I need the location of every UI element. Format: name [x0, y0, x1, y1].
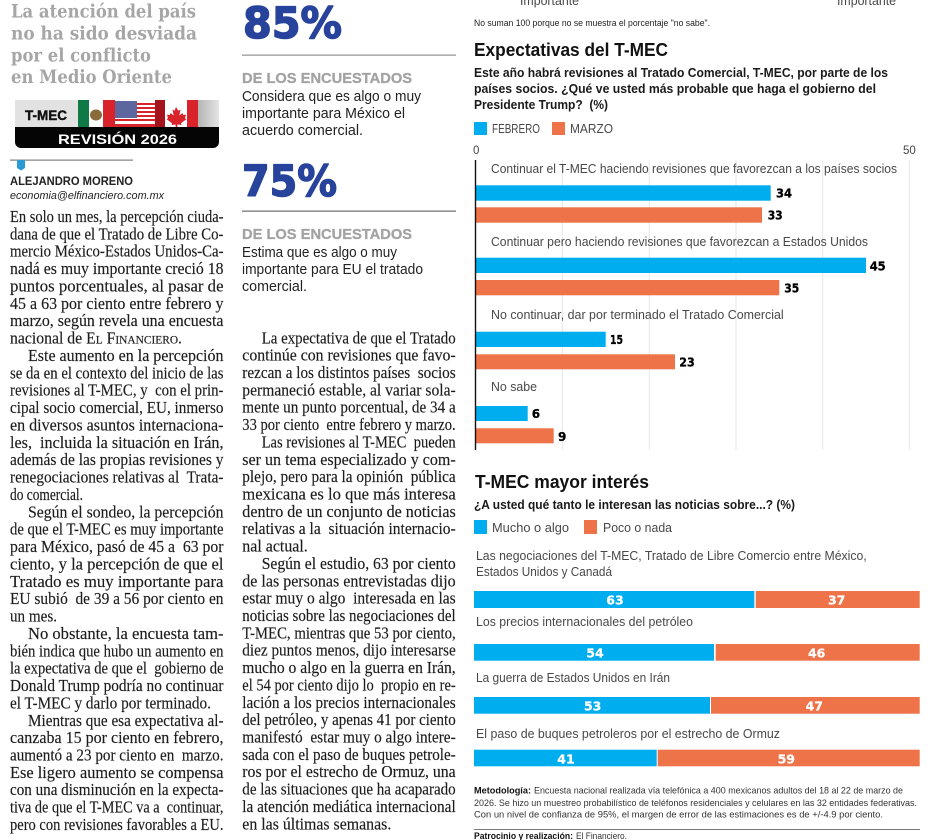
- article text column 2: mucho o algo en la guerra en Irán,: [242, 658, 456, 677]
- article text column 2: 33 por ciento entre febrero y marzo.: [242, 415, 456, 434]
- article text column 1: el T-MEC y darlo por terminado.: [10, 693, 211, 712]
- article text column 2: La expectativa de que el Tratado: [262, 328, 456, 347]
- article text column 1: [10, 207, 224, 834]
- stacked bar chart: interés: 63: [606, 592, 624, 607]
- headline: [11, 2, 197, 88]
- heading: T-MEC mayor interés: [475, 471, 649, 492]
- cropped chart labels at top: [520, 0, 896, 8]
- article text column 1: aumentó a 23 por ciento en marzo.: [10, 746, 224, 764]
- stat callout: 85%: DE LOS ENCUESTADOS: [242, 70, 412, 87]
- headline: por el conflicto: [11, 46, 151, 66]
- badge: T-MEC Revisión 2026: [15, 100, 219, 148]
- stat callout: 75%: importante para EU el tratado: [242, 262, 423, 278]
- article text column 1: de que el T-MEC es muy importante: [10, 520, 224, 539]
- article text column 1: Donald Trump podría no continuar: [10, 676, 224, 695]
- article text column 2: ros por el estrecho de Ormuz, una: [242, 762, 456, 781]
- article text column 2: de las personas entrevistadas dijo: [242, 571, 456, 590]
- article text column 1: 45 a 63 por ciento entre febrero y: [10, 294, 224, 313]
- icon: US flag: [115, 100, 155, 128]
- methodology note: Con un nivel de confianza de 95%, el margen de error de las estimaciones es de +/-4.9 por ciento.: [474, 810, 883, 821]
- question: ¿A usted qué tanto le interesan las noticias sobre...? (%): [474, 498, 795, 512]
- stacked bar chart: interés: Estados Unidos y Canadá: [476, 564, 613, 579]
- article text column 1: en diversos asuntos internaciona-: [10, 416, 224, 434]
- article text column 1: les, incluida la situación en Irán,: [10, 433, 224, 452]
- article text column 2: continúe con revisiones que favo-: [242, 346, 456, 365]
- legend: FEBRERO: [492, 121, 540, 136]
- methodology note: 2026. Se hizo un muestreo probabilístico de teléfonos residenciales y celulares en las 32 entidades federativas.: [474, 798, 917, 809]
- article text column 2: noticias sobre las negociaciones del: [242, 606, 456, 625]
- article text column 1: dana de que el Tratado de Libre Co-: [10, 224, 224, 243]
- bar chart: expectativas: 0: [473, 145, 479, 157]
- article text column 1: Mientras que esa expectativa al-: [28, 711, 224, 730]
- article text column 1: pero con revisiones favorables a EU.: [10, 815, 224, 834]
- bar chart: expectativas: 15: [610, 333, 623, 347]
- stacked bar chart: interés: Las negociaciones del T-MEC, Tratado de Libre Comercio entre México,: [476, 548, 867, 563]
- legend: Mucho o algo: [492, 520, 569, 535]
- article text column 2: relativas a la situación internacio-: [242, 519, 456, 538]
- article text column 1: mercio México-Estados Unidos-Ca-: [10, 242, 224, 261]
- article text column 2: nal actual.: [242, 537, 308, 556]
- article text column 1: con una disminución en la expecta-: [10, 780, 224, 799]
- heading: Expectativas del T-MEC: [474, 39, 668, 60]
- article text column 2: manifestó estar muy o algo intere-: [242, 728, 456, 746]
- article text column 1: No obstante, la encuesta tam-: [28, 624, 224, 643]
- article text column 2: [242, 328, 456, 833]
- article text column 1: ciento, y la percepción de que el: [10, 554, 224, 573]
- stacked bar chart: interés: Los precios internacionales del petróleo: [476, 614, 693, 629]
- headline: en Medio Oriente: [11, 67, 172, 88]
- author byline: ALEJANDRO MORENO: [10, 174, 133, 188]
- question: países socios. ¿Qué ve usted más probable que haga el gobierno del: [474, 82, 876, 96]
- legend: [474, 121, 613, 136]
- stat callout: 85%: [242, 0, 456, 139]
- article text column 1: nadá es muy importante creció 18: [10, 259, 224, 278]
- stacked bar chart: interés: 53: [584, 698, 601, 713]
- bar chart: expectativas: [473, 145, 916, 450]
- methodology note: [474, 785, 917, 821]
- panel: T-MEC mayor interés: [474, 471, 920, 766]
- article text column 1: para México, pasó de 45 a 63 por: [10, 537, 224, 556]
- badge: T-MEC Revisión 2026: T-MEC: [25, 108, 67, 123]
- stat callout: 85%: Considera que es algo o muy: [242, 89, 422, 105]
- stat callout: 75%: Estima que es algo o muy: [242, 245, 398, 261]
- question: [474, 66, 888, 112]
- credits: [474, 829, 920, 840]
- stacked bar chart: interés: 54: [586, 645, 604, 660]
- article text column 2: mente un punto porcentual, de 34 a: [242, 398, 456, 417]
- methodology note: Metodología:: [474, 785, 531, 796]
- article text column 1: tiva de que el T-MEC va a continuar,: [10, 798, 224, 817]
- stacked bar chart: interés: La guerra de Estados Unidos en Irán: [476, 670, 670, 685]
- article text column 2: ser un tema especializado y com-: [242, 450, 456, 469]
- article text column 1: Tratado es muy importante para: [10, 572, 224, 591]
- icon: Mexican flag: [78, 100, 115, 128]
- stacked bar chart: interés: [474, 548, 920, 766]
- article text column 1: Ese ligero aumento se compensa: [10, 763, 224, 782]
- question: Presidente Trump? (%): [474, 98, 608, 112]
- panel: Expectativas del T-MEC: [473, 39, 916, 450]
- article text column 1: cipal socio comercial, EU, inmerso: [10, 398, 224, 417]
- article text column 1: Según el sondeo, la percepción: [28, 502, 224, 521]
- stat callout: 75%: DE LOS ENCUESTADOS: [242, 226, 412, 243]
- stat callout: 75%: comercial.: [242, 279, 307, 295]
- bar chart: expectativas: No continuar, dar por terminado el Tratado Comercial: [491, 307, 784, 322]
- stacked bar chart: interés: 37: [828, 592, 845, 607]
- article text column 2: permaneció estable, al variar sola-: [242, 380, 456, 399]
- article text column 1: se da en el contexto del inicio de las: [10, 363, 224, 382]
- stacked bar chart: interés: 59: [778, 751, 795, 766]
- bar chart: expectativas: Continuar el T-MEC haciendo revisiones que favorezcan a los países socios: [491, 161, 897, 176]
- stacked bar chart: interés: 41: [557, 751, 575, 766]
- article text column 1: puntos porcentuales, al pasar de: [10, 276, 224, 296]
- article text column 2: el 54 por ciento dijo lo propio en re-: [242, 676, 456, 694]
- legend: MARZO: [570, 121, 613, 136]
- article text column 2: en las últimas semanas.: [242, 814, 391, 833]
- author byline: [10, 160, 164, 202]
- article text column 2: sada con el paso de buques petrole-: [242, 745, 456, 764]
- stat callout: 85%: acuerdo comercial.: [242, 123, 363, 139]
- article text column 1: do comercial.: [10, 485, 83, 504]
- legend: Poco o nada: [603, 520, 673, 535]
- bar chart: expectativas: 23: [679, 356, 695, 370]
- article text column 2: del petróleo, y apenas 41 por ciento: [242, 710, 456, 729]
- bar chart: expectativas: 9: [558, 430, 566, 444]
- article text column 1: revisiones al T-MEC, y con el prin-: [10, 381, 224, 400]
- bar chart: expectativas: No sabe: [491, 379, 537, 394]
- article text column 2: Según el estudio, 63 por ciento: [262, 554, 456, 573]
- article text column 1: bién indica que hubo un aumento en: [10, 641, 224, 660]
- article text column 2: rezcan a los distintos países socios: [242, 363, 456, 382]
- headline: no ha sido desviada: [11, 24, 197, 44]
- footnote: No suman 100 porque no se muestra el porcentaje "no sabe".: [474, 18, 710, 28]
- methodology note: Encuesta nacional realizada vía telefónica a 400 mexicanos adultos del 18 al 22 de marzo de: [534, 785, 903, 796]
- article text column 2: T-MEC, mientras que 53 por ciento,: [242, 623, 456, 642]
- bar chart: expectativas: 33: [768, 209, 783, 223]
- author byline: economia@elfinanciero.com.mx: [10, 190, 164, 202]
- article text column 1: un mes.: [10, 606, 57, 626]
- stat callout: 85%: importante para México el: [242, 106, 405, 122]
- badge: T-MEC Revisión 2026: REVISIÓN 2026: [58, 132, 178, 147]
- article text column 2: estar muy o algo interesada en las: [242, 589, 456, 608]
- stat callout: 75%: 75%: [242, 157, 337, 207]
- bar chart: expectativas: Continuar pero haciendo revisiones que favorezcan a Estados Unidos: [491, 234, 868, 249]
- stat callout: 75%: [242, 157, 456, 295]
- headline: La atención del país: [11, 2, 196, 22]
- article text column 2: mexicana es lo que más interesa: [242, 484, 456, 504]
- bar chart: expectativas: 6: [532, 407, 540, 421]
- article text column 2: lación a los precios internacionales: [242, 693, 456, 712]
- article text column 2: Las revisiones al T-MEC pueden: [262, 432, 456, 451]
- article text column 1: marzo, según revela una encuesta: [10, 311, 224, 330]
- bar chart: expectativas: 35: [784, 282, 799, 296]
- article text column 1: canzaba 15 por ciento en febrero,: [10, 728, 224, 747]
- bar chart: expectativas: 45: [870, 260, 886, 274]
- article text column 1: renegociaciones relativas al Trata-: [10, 468, 224, 487]
- article text column 1: además de las propias revisiones y: [10, 450, 224, 469]
- article text column 2: diez puntos menos, dijo interesarse: [242, 641, 456, 660]
- article text column 2: plejo, pero para la opinión pública: [242, 467, 456, 486]
- bar chart: expectativas: 50: [903, 145, 916, 157]
- article text column 1: Este aumento en la percepción: [28, 346, 224, 365]
- stacked bar chart: interés: 46: [808, 645, 826, 660]
- article text column 1: EU subió de 39 a 56 por ciento en: [10, 589, 224, 608]
- article text column 2: de las situaciones que ha acaparado: [242, 780, 456, 799]
- article text column 1: la expectativa de que el gobierno de: [10, 659, 224, 678]
- stacked bar chart: interés: El paso de buques petroleros por el estrecho de Ormuz: [476, 726, 780, 741]
- article text column 1: En solo un mes, la percepción ciuda-: [10, 207, 224, 226]
- article text column 2: la atención mediática internacional: [242, 797, 456, 816]
- article text column 1: nacional de El Financiero.: [10, 329, 182, 348]
- legend: [474, 520, 673, 535]
- bar chart: expectativas: 34: [776, 187, 792, 201]
- question: Este año habrá revisiones al Tratado Comercial, T-MEC, por parte de los: [474, 66, 888, 80]
- stacked bar chart: interés: 47: [806, 698, 823, 713]
- icon: Canadian flag: [155, 100, 198, 128]
- stat callout: 85%: 85%: [243, 0, 342, 49]
- article text column 2: dentro de un conjunto de noticias: [242, 502, 456, 521]
